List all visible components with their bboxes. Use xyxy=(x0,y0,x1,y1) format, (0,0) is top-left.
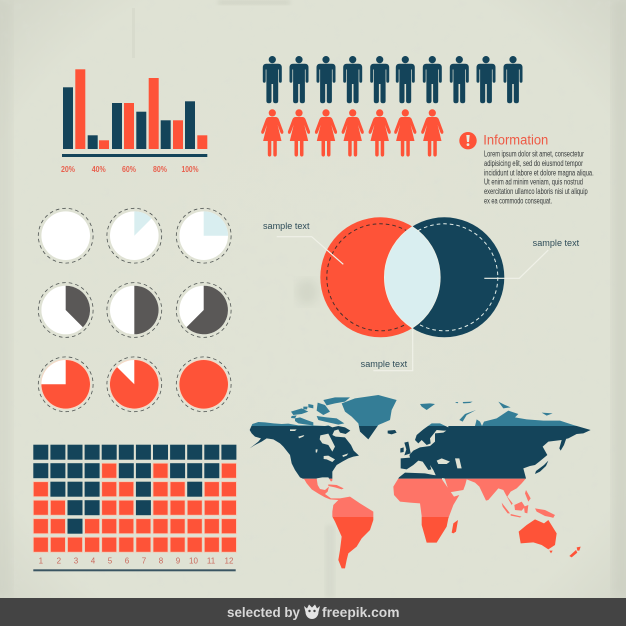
icon: information exclamation xyxy=(459,132,477,149)
bar chart: 100% xyxy=(182,164,199,174)
text block: lorem ipsum: ex ea commodo consequat. xyxy=(484,196,552,205)
text block: lorem ipsum xyxy=(484,149,594,205)
text block: lorem ipsum: exercitation ullamco laboris nisi ut aliquip xyxy=(484,187,588,196)
venn: left circle xyxy=(320,217,440,337)
heat grid calendar: 6 xyxy=(125,556,130,566)
callout: right sample text: sample text xyxy=(533,238,580,248)
heading: information: Information xyxy=(483,132,548,148)
heat grid calendar: 10 xyxy=(189,556,198,566)
footer text: selected by: selected by xyxy=(227,605,300,620)
text block: lorem ipsum: Ut enim ad minim veniam, quis nostrud xyxy=(484,178,583,187)
heat grid calendar: 12 xyxy=(225,556,234,566)
bar chart: 80% xyxy=(153,164,167,174)
heat grid calendar: 8 xyxy=(159,556,164,566)
footer bar xyxy=(0,598,626,626)
venn diagram xyxy=(320,217,504,337)
heat grid calendar xyxy=(33,445,236,571)
callout: right sample text xyxy=(484,238,580,278)
heat grid calendar: 2 xyxy=(57,556,62,566)
venn: overlap lens xyxy=(384,227,440,328)
bar chart xyxy=(61,69,207,174)
callout: bottom sample text: sample text xyxy=(361,359,408,369)
bar chart: 40% xyxy=(92,164,106,174)
heat grid calendar: 1 xyxy=(39,556,44,566)
text block: lorem ipsum: Lorem ipsum dolor sit amet, consectetur xyxy=(484,149,584,158)
heat grid calendar: 5 xyxy=(108,556,113,566)
world map xyxy=(250,395,590,568)
text block: lorem ipsum: adipisicing elit, sed do eiusmod tempor xyxy=(484,159,583,168)
venn: right circle xyxy=(384,217,504,337)
bar chart: 20% xyxy=(61,164,75,174)
heat grid calendar: 7 xyxy=(142,556,147,566)
pictogram: men row xyxy=(263,56,522,103)
callout: left sample text: sample text xyxy=(263,221,310,231)
heat grid calendar: 4 xyxy=(91,556,96,566)
pie charts grid xyxy=(38,208,231,412)
heat grid calendar: 11 xyxy=(207,556,216,566)
callout: bottom sample text xyxy=(361,328,413,371)
heat grid calendar: 9 xyxy=(176,556,181,566)
bar chart: 60% xyxy=(122,164,136,174)
pictogram: women row xyxy=(261,109,443,157)
heat grid calendar: 3 xyxy=(74,556,79,566)
footer text: freepik.com: freepik.com xyxy=(322,605,400,620)
callout: left sample text xyxy=(263,221,343,264)
icon: freepik logo xyxy=(304,604,320,619)
